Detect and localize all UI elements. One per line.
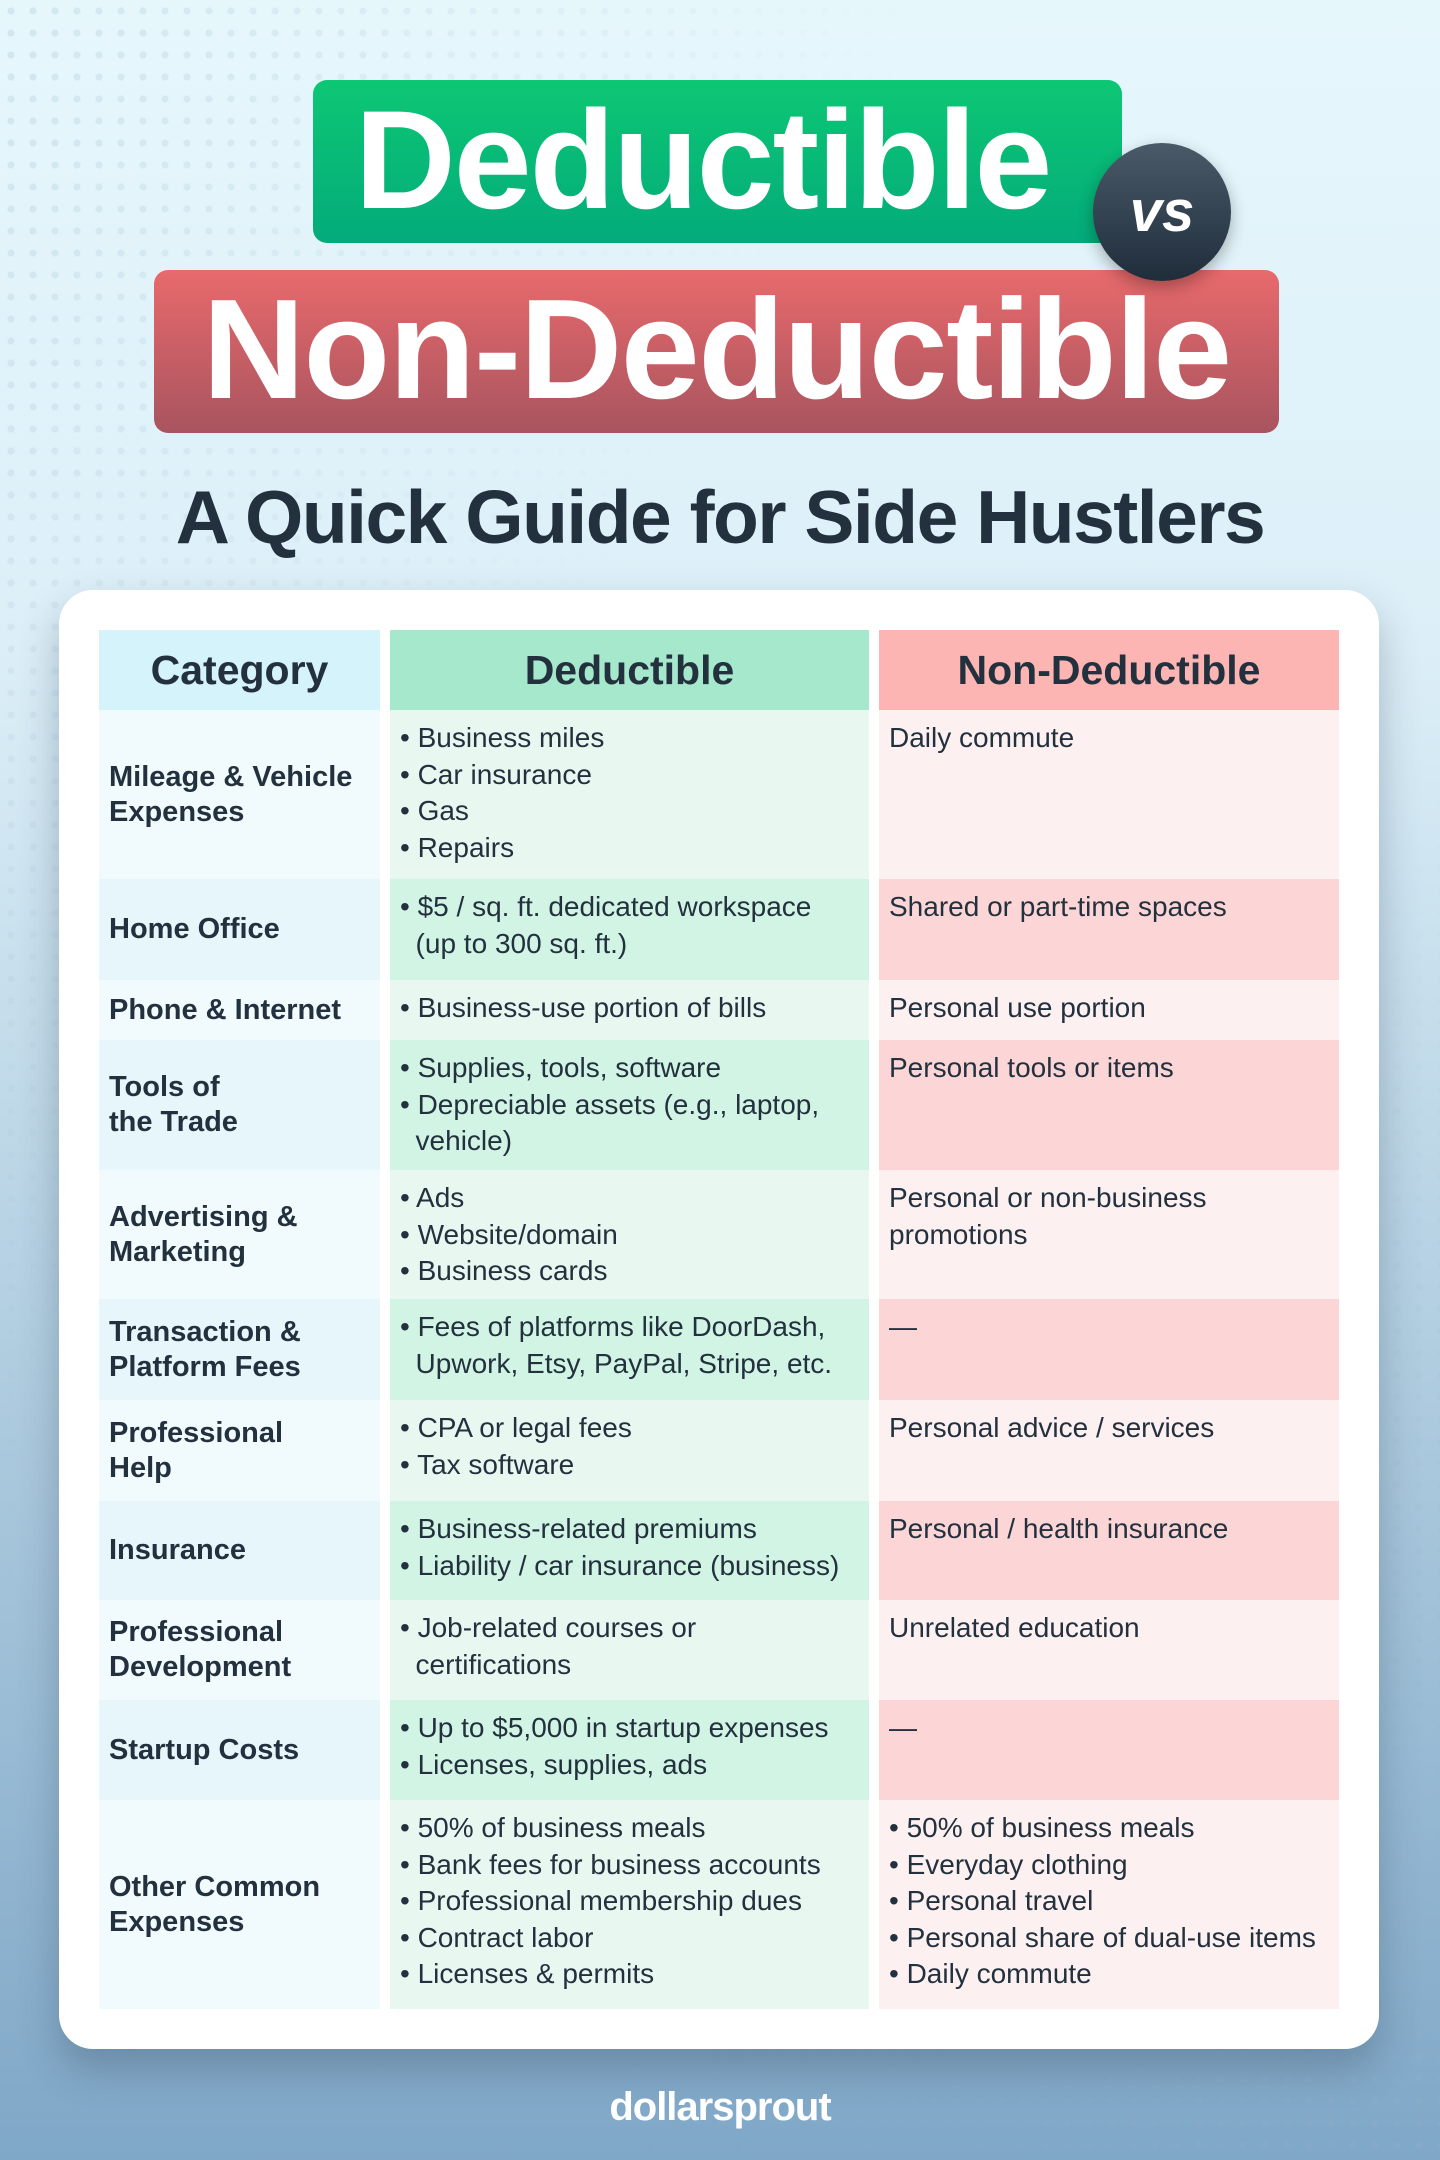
row: mileage: • Repairs [400,832,514,862]
row: insurance: Insurance [109,1534,246,1566]
row: other: Other Common [109,1870,320,1902]
subtitle: A Quick Guide for Side Hustlers [176,475,1264,559]
panel: card [59,590,1379,2049]
row: tools: • Supplies, tools, software [400,1052,721,1083]
logo: dollarsprout [609,2085,831,2129]
row: other: Expenses [109,1906,244,1938]
row: mileage: • Business miles [400,722,604,753]
row: insurance: Personal / health insurance [889,1513,1228,1544]
row: development [99,1600,1339,1700]
header row: Deductible [525,647,734,693]
row: transaction: — [889,1311,917,1342]
row: professional help: Personal advice / services [889,1412,1214,1443]
row: tools: Personal tools or items [889,1052,1174,1083]
row: transaction: • Fees of platforms like DoorDash, [400,1311,825,1342]
row: development: Development [109,1651,291,1683]
row: startup: Startup Costs [109,1734,299,1766]
row: tools: • Depreciable assets (e.g., laptop, [400,1088,819,1120]
row: development: Unrelated education [889,1612,1140,1643]
row: tools: Tools of [109,1071,220,1103]
row: tools: the Trade [109,1106,238,1138]
row: advertising: Advertising & [109,1201,298,1233]
row: development: Professional [109,1616,283,1648]
row: other: • Contract labor [400,1922,593,1952]
row: transaction: Upwork, Etsy, PayPal, Stripe, etc. [416,1348,832,1378]
row: transaction: Platform Fees [109,1350,301,1382]
row: phone: Personal use portion [889,992,1146,1023]
row: phone: • Business-use portion of bills [400,992,766,1023]
row: other [99,1800,1339,2009]
row: advertising: • Business cards [400,1255,607,1286]
header row: Category [151,647,328,693]
row: mileage: • Car insurance [400,758,592,790]
row: other: • 50% of business meals [400,1812,706,1843]
row: transaction [99,1299,1339,1400]
row: mileage: Daily commute [889,722,1074,753]
row: development: • Job-related courses or [400,1612,696,1643]
icon: vs badge: vs [1130,179,1194,244]
row: advertising: Marketing [109,1236,246,1268]
header row [99,630,1339,710]
title: Deductible: Deductible [355,81,1050,238]
row: advertising: Personal or non-business [889,1182,1207,1213]
row: startup: • Up to $5,000 in startup expenses [400,1712,829,1743]
row: advertising: • Ads [400,1182,464,1213]
row: advertising: • Website/domain [400,1218,618,1250]
row: professional help: Help [109,1452,172,1484]
row: other: • Daily commute [889,1958,1092,1989]
row: startup: • Licenses, supplies, ads [400,1748,707,1780]
title: Non-Deductible: Non-Deductible [202,270,1231,429]
row: tools [99,1040,1339,1170]
icon: vs badge [1093,143,1231,281]
row: home office: Shared or part-time spaces [889,891,1227,922]
row: other: • Professional membership dues [400,1885,802,1916]
row: other: • Everyday clothing [889,1848,1128,1880]
row: home office: • $5 / sq. ft. dedicated workspace [400,891,811,922]
row: other: • Bank fees for business accounts [400,1848,821,1880]
row: other: • Licenses & permits [400,1958,654,1989]
row: other: • 50% of business meals [889,1812,1195,1843]
row: home office: (up to 300 sq. ft.) [416,928,627,958]
row: home office: Home Office [109,913,280,945]
row: development: certifications [416,1648,571,1680]
row: phone: Phone & Internet [109,994,341,1026]
row: insurance: • Business-related premiums [400,1513,757,1544]
row: mileage: Expenses [109,796,244,828]
row: other: • Personal share of dual-use items [889,1922,1316,1952]
row: advertising: promotions [889,1218,1028,1250]
row: mileage [99,710,1339,879]
row: mileage: • Gas [400,795,469,826]
header row: Non-Deductible [958,647,1260,693]
row: home office [99,879,1339,980]
row: advertising [99,1170,1339,1299]
row: professional help: • Tax software [400,1448,574,1480]
row: insurance [99,1501,1339,1600]
row: transaction: Transaction & [109,1316,301,1348]
row: startup [99,1700,1339,1800]
table [99,630,1339,2009]
row: insurance: • Liability / car insurance (business) [400,1550,839,1580]
row: phone [99,980,1339,1040]
row: professional help: Professional [109,1416,283,1448]
row: professional help: • CPA or legal fees [400,1412,632,1443]
row: startup: — [889,1712,917,1743]
row: mileage: Mileage & Vehicle [109,760,352,792]
row: tools: vehicle) [416,1125,512,1156]
row: professional help [99,1400,1339,1501]
row: other: • Personal travel [889,1885,1093,1916]
